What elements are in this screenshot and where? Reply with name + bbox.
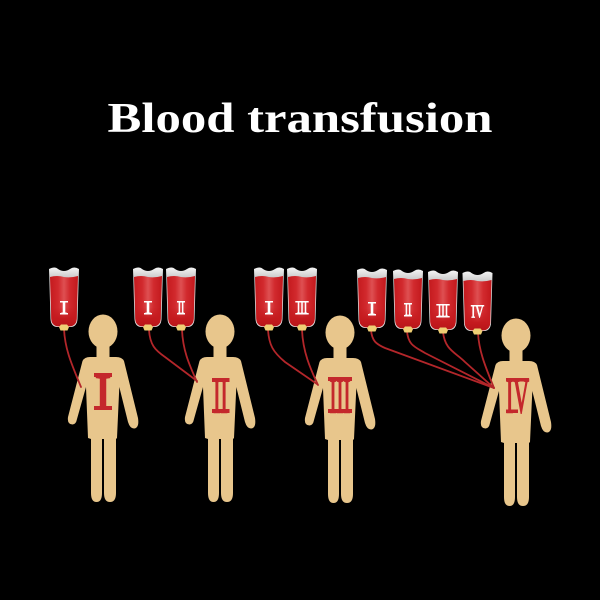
blood bag I (357, 268, 387, 332)
blood bag I: I (61, 298, 67, 318)
blood bag I (49, 268, 79, 330)
blood bag III: III (297, 298, 307, 318)
group: recipient III (254, 268, 375, 503)
blood bag II: II (178, 298, 184, 318)
blood bag I: I (369, 298, 375, 318)
figure: person III (305, 316, 375, 503)
figure: person IV (481, 318, 551, 506)
blood bag I (133, 268, 163, 330)
blood bag III: III (438, 300, 448, 320)
blood bag II: II (405, 300, 411, 320)
group: recipient II: II (213, 367, 228, 423)
figure: person II (185, 314, 255, 502)
blood bag IV (462, 272, 492, 334)
group: recipient I (49, 268, 138, 502)
group: recipient IV (357, 268, 551, 506)
tubes to person IV (371, 330, 494, 388)
group: recipient II (133, 268, 255, 502)
tube to person I (64, 329, 81, 387)
tubes to person II (149, 330, 197, 382)
blood bag III (287, 268, 317, 330)
tubes to person III (268, 330, 318, 385)
blood bag I (254, 268, 284, 330)
blood bag II (166, 268, 196, 330)
torso numeral III (328, 367, 352, 423)
blood bag IV: IV (471, 302, 484, 322)
torso numeral I: I (95, 364, 111, 420)
title: Blood transfusion (108, 96, 492, 142)
blood bag I: I (266, 298, 272, 318)
torso numeral II (212, 367, 230, 423)
torso numeral IV (506, 367, 529, 423)
group: recipient IV: IV (506, 367, 529, 423)
blood bag II (393, 270, 423, 332)
figure: person I (68, 314, 138, 502)
group: recipient III: III (330, 367, 350, 423)
blood bag I: I (145, 298, 151, 318)
blood bag III (428, 270, 458, 334)
